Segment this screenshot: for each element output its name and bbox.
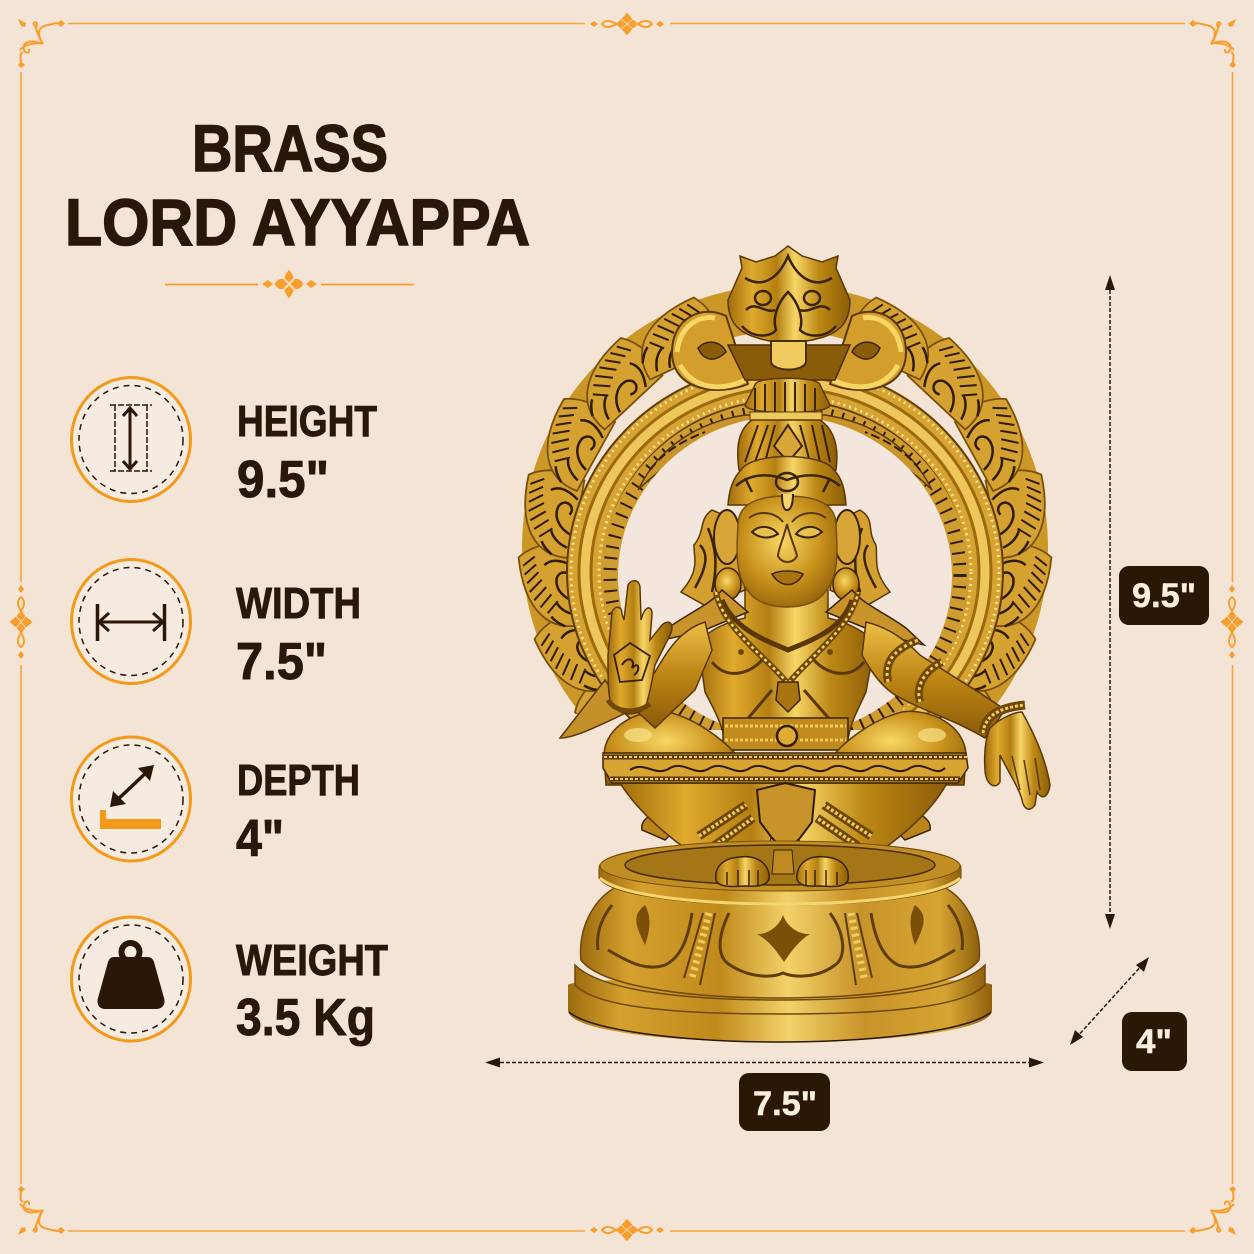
crown and topknot xyxy=(728,378,846,505)
spec: depth xyxy=(72,737,360,868)
value: weight: 3.5 Kg xyxy=(236,989,375,1047)
icon: height xyxy=(72,378,190,502)
top disc xyxy=(599,842,961,905)
dimension badge: depth xyxy=(1122,1012,1187,1071)
icon: weight xyxy=(72,917,190,1041)
head xyxy=(737,494,837,607)
icon: width xyxy=(72,560,190,684)
spec: width xyxy=(72,560,361,691)
lotus dome xyxy=(581,885,979,998)
viewer-right arm and hand xyxy=(862,622,1050,809)
dimension: height arrow xyxy=(1105,275,1115,929)
title divider ornament xyxy=(165,269,414,299)
kirtimukha crest xyxy=(672,246,906,390)
title: LORD AYYAPPA xyxy=(65,185,530,259)
label: height: HEIGHT xyxy=(237,397,377,446)
spec: height xyxy=(72,378,377,509)
label: weight: WEIGHT xyxy=(236,936,388,985)
arch: patterned inner band xyxy=(610,410,960,740)
value: height: 9.5" xyxy=(237,451,329,509)
decorative yoga band xyxy=(603,753,968,783)
value: depth: 4" xyxy=(236,810,284,868)
dimension: depth arrow xyxy=(1070,957,1149,1045)
legs and knees xyxy=(604,711,966,868)
base upper tier xyxy=(575,965,985,1014)
statue: brass Lord Ayyappa xyxy=(517,246,1053,1042)
label: width: WIDTH xyxy=(236,579,361,628)
torso and neck xyxy=(662,590,924,750)
viewer-left raised hand and forearm xyxy=(608,581,712,728)
arch: smooth inner rings xyxy=(566,380,1004,730)
arch: lower left tip xyxy=(560,680,628,738)
dimension badge: width xyxy=(739,1073,830,1131)
dimension badge: height xyxy=(1119,566,1209,625)
dimension badge: height: 9.5" xyxy=(1132,577,1196,615)
statue halo opening xyxy=(618,416,952,736)
central ornament xyxy=(757,783,815,852)
base bottom tier xyxy=(568,978,992,1042)
icon: depth xyxy=(72,737,190,861)
title xyxy=(65,111,530,259)
pedestal xyxy=(568,841,992,1042)
hair, ears and earrings xyxy=(681,510,890,606)
dimension badge: depth: 4" xyxy=(1136,1023,1172,1061)
dimension: width arrow xyxy=(485,1058,1044,1068)
label: depth: DEPTH xyxy=(237,756,360,805)
spec: weight xyxy=(72,917,388,1047)
feet xyxy=(716,850,848,886)
arch: prabhavali ring xyxy=(518,290,1052,714)
value: width: 7.5" xyxy=(236,633,327,691)
dimension badge: width: 7.5" xyxy=(753,1085,817,1123)
title: BRASS xyxy=(192,111,388,185)
